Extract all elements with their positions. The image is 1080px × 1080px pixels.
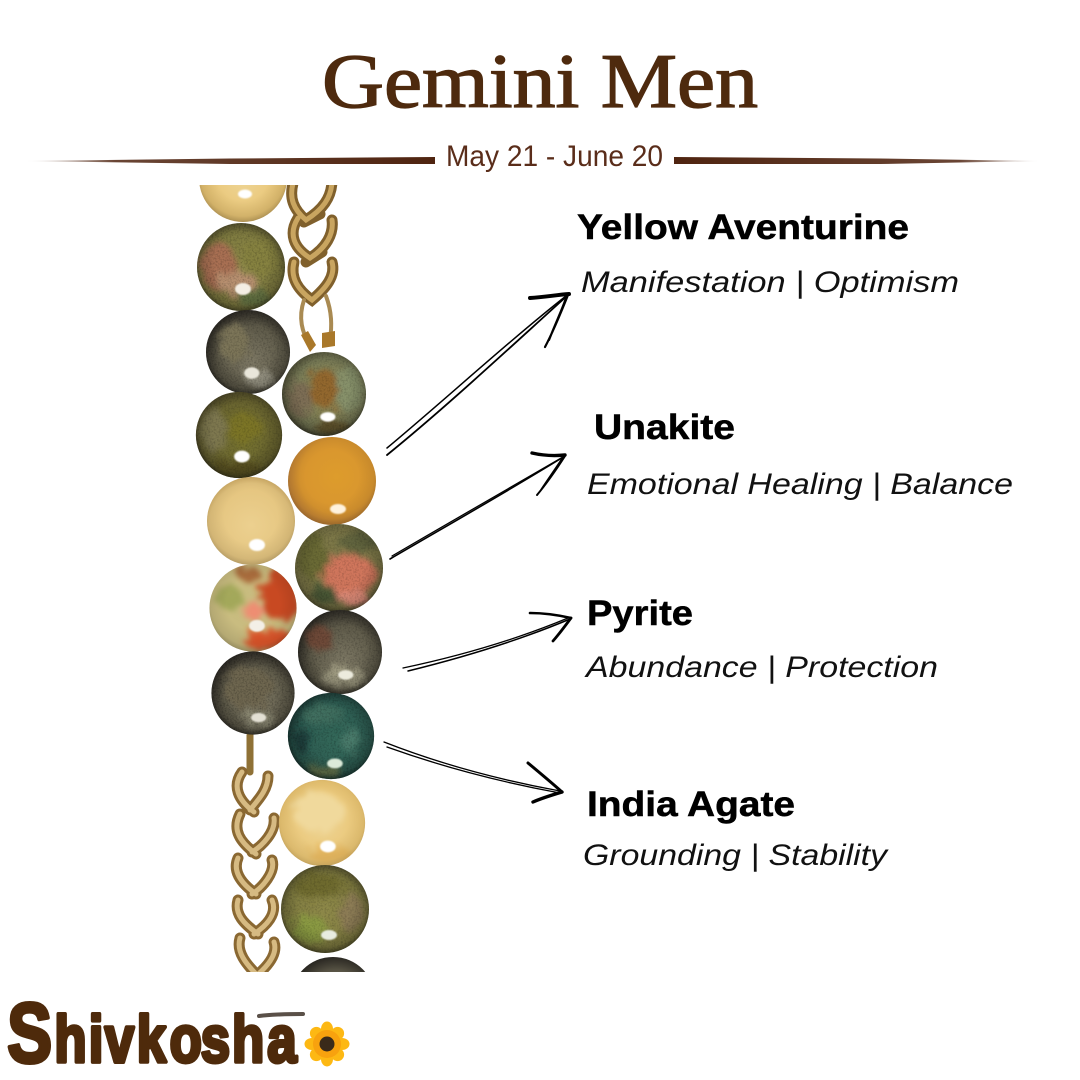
label: india agate: India Agate: [587, 785, 795, 824]
gold chain: bottom: [236, 735, 275, 976]
bead: pyrite lower: [211, 651, 295, 735]
bead: yellow aventurine lower: [279, 780, 365, 866]
label: yellow aventurine: Manifestation | Optimism: [581, 266, 959, 299]
bead: yellow aventurine top: [200, 185, 286, 222]
bead: unakite lower: [281, 865, 369, 953]
bead: pyrite right: [298, 610, 382, 694]
label: yellow aventurine: [577, 208, 959, 299]
label: unakite: [587, 408, 1013, 501]
label: pyrite: Abundance | Protection: [584, 651, 938, 684]
logo: Shivkosha: Shivkosha: [7, 987, 297, 1080]
bead: orange aventurine: [288, 437, 376, 525]
bead: yellow aventurine: [207, 477, 295, 565]
bead: india agate: [288, 693, 374, 779]
arrow: india agate: [384, 742, 562, 802]
gold chain: top: [292, 180, 335, 352]
bead: pyrite bottom: [300, 957, 366, 972]
icon: sunflower: [304, 1022, 350, 1066]
bracelet photo: [196, 185, 383, 972]
label: unakite: Emotional Healing | Balance: [587, 468, 1013, 501]
label: yellow aventurine: Yellow Aventurine: [577, 208, 909, 247]
label: pyrite: Pyrite: [587, 594, 693, 633]
bead: olive unakite: [196, 392, 282, 478]
label: india agate: [583, 785, 889, 872]
arrow: yellow aventurine: [387, 294, 569, 455]
label: india agate: Grounding | Stability: [583, 839, 889, 872]
label: pyrite: [584, 594, 938, 684]
bead: red unakite: [209, 564, 301, 652]
title: Gemini Men: [322, 38, 758, 124]
date range: May 21 - June 20: [446, 140, 663, 173]
date divider: [25, 140, 1040, 173]
bead: green unakite: [282, 352, 366, 436]
arrow: pyrite: [403, 613, 571, 671]
arrow: unakite: [390, 453, 565, 559]
label: unakite: Unakite: [594, 408, 735, 447]
bead: pink unakite: [295, 524, 383, 612]
bead: pyrite: [206, 310, 290, 394]
bead: unakite: [197, 223, 285, 311]
